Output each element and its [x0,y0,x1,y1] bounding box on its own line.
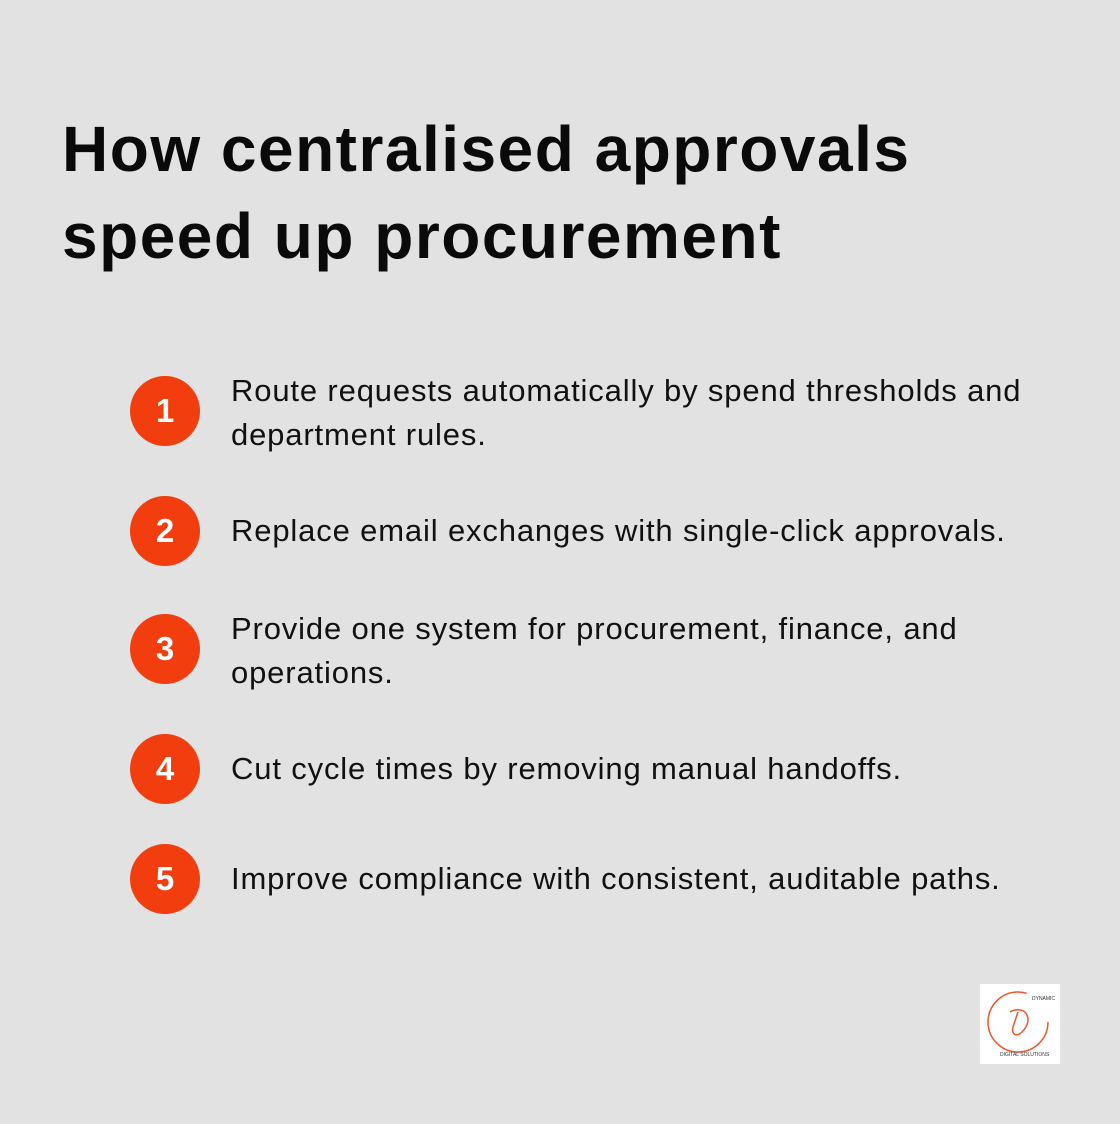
title: speed up procurement [62,200,782,272]
step 1 [130,376,200,446]
step 3: 3 [156,630,174,667]
step 2 [130,496,200,566]
logo: DIGITAL SOLUTIONS [1000,1052,1050,1058]
title [62,113,910,272]
step 1 text: Route requests automatically by spend thresholds and [231,373,1021,408]
step 4 text: Cut cycle times by removing manual handoffs. [231,751,902,786]
step 3 text [231,611,958,690]
step 1: 1 [156,392,174,429]
step 5 [130,844,200,914]
step 3 text: Provide one system for procurement, finance, and [231,611,958,646]
step 5: 5 [156,860,174,897]
step 2 text: Replace email exchanges with single-click approvals. [231,513,1006,548]
step 1 text: department rules. [231,417,487,452]
step 4 [130,734,200,804]
logo: DYNAMIC [1032,996,1055,1002]
step 3 [130,614,200,684]
logo [980,984,1060,1064]
step 5 text: Improve compliance with consistent, auditable paths. [231,861,1001,896]
step 4: 4 [156,750,174,787]
step 2: 2 [156,512,174,549]
step 3 text: operations. [231,655,394,690]
step 1 text [231,373,1021,452]
title: How centralised approvals [62,113,910,185]
